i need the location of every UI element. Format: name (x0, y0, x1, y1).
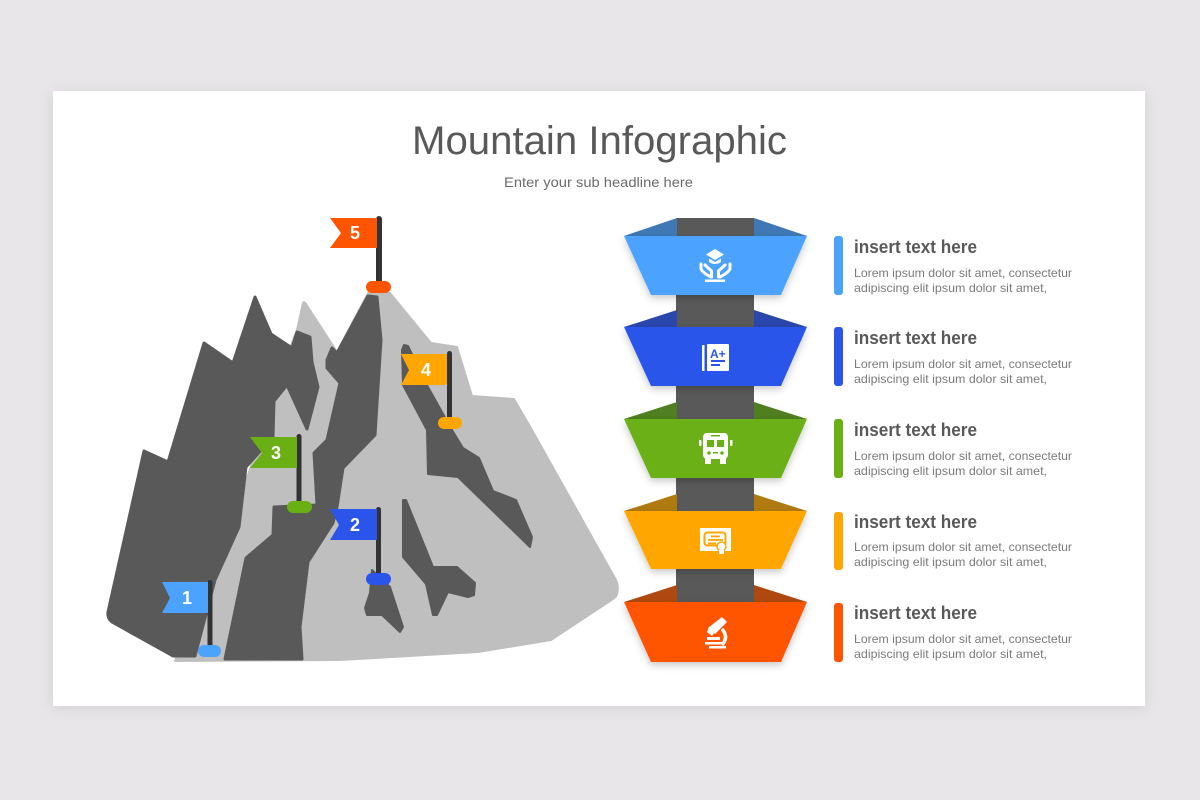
icon: hands holding graduation cap (701, 249, 730, 282)
tier 1 (624, 218, 807, 295)
tower of colored trapezoids (624, 218, 807, 662)
mountain: light base (175, 293, 618, 661)
text block 4 (834, 512, 1072, 570)
text block 4: adipiscing elit ipsum dolor sit amet, (854, 555, 1047, 569)
text block 4: insert text here (854, 512, 977, 532)
central column (676, 218, 754, 608)
icon: certificate (700, 528, 731, 554)
subtitle: Enter your sub headline here (504, 174, 693, 190)
text block 5: adipiscing elit ipsum dolor sit amet, (854, 647, 1047, 661)
mountain: fork-shaped dark streak (403, 500, 475, 615)
text block 3: Lorem ipsum dolor sit amet, consectetur (854, 449, 1072, 463)
tier 2 (624, 310, 807, 386)
tier 5 (624, 585, 807, 662)
text block 2: Lorem ipsum dolor sit amet, consectetur (854, 357, 1072, 371)
text block 5: Lorem ipsum dolor sit amet, consectetur (854, 632, 1072, 646)
flag 3 (250, 434, 312, 513)
text block 3: adipiscing elit ipsum dolor sit amet, (854, 464, 1047, 478)
flag 5: 5 (350, 223, 360, 243)
icon: bus (699, 433, 732, 464)
mountain illustration (108, 293, 618, 661)
text block 2: insert text here (854, 328, 977, 348)
icon: A+ report (702, 344, 729, 371)
panel: white card (53, 91, 1145, 706)
text block 2 (834, 327, 1072, 386)
mountain: center dark ridge (225, 296, 381, 659)
tier 4 (624, 494, 807, 569)
flag 4: 4 (421, 360, 431, 380)
flag 4 (401, 351, 462, 429)
text block 1: insert text here (854, 237, 977, 257)
text block 2: adipiscing elit ipsum dolor sit amet, (854, 372, 1047, 386)
text block 1: adipiscing elit ipsum dolor sit amet, (854, 281, 1047, 295)
flag 5 (330, 216, 391, 293)
mountain: left dark face (108, 297, 318, 656)
title: Mountain Infographic (412, 119, 787, 163)
text block 3: insert text here (854, 420, 977, 440)
text block 5 (834, 603, 1072, 662)
flag 2: 2 (350, 515, 360, 535)
text block 1 (834, 236, 1072, 295)
text block 5: insert text here (854, 603, 977, 623)
flag 3: 3 (271, 443, 281, 463)
text block 4: Lorem ipsum dolor sit amet, consectetur (854, 540, 1072, 554)
mountain: small dark streak (365, 570, 403, 632)
icon: A+ report: A+ (710, 347, 726, 361)
icon: microscope (705, 617, 727, 648)
text block 1: Lorem ipsum dolor sit amet, consectetur (854, 266, 1072, 280)
flag 1: 1 (182, 588, 192, 608)
text block 3 (834, 419, 1072, 478)
flag 2 (330, 507, 391, 585)
tier 3 (624, 402, 807, 478)
flag 1 (162, 580, 221, 657)
mountain: right dark streak (402, 345, 532, 547)
